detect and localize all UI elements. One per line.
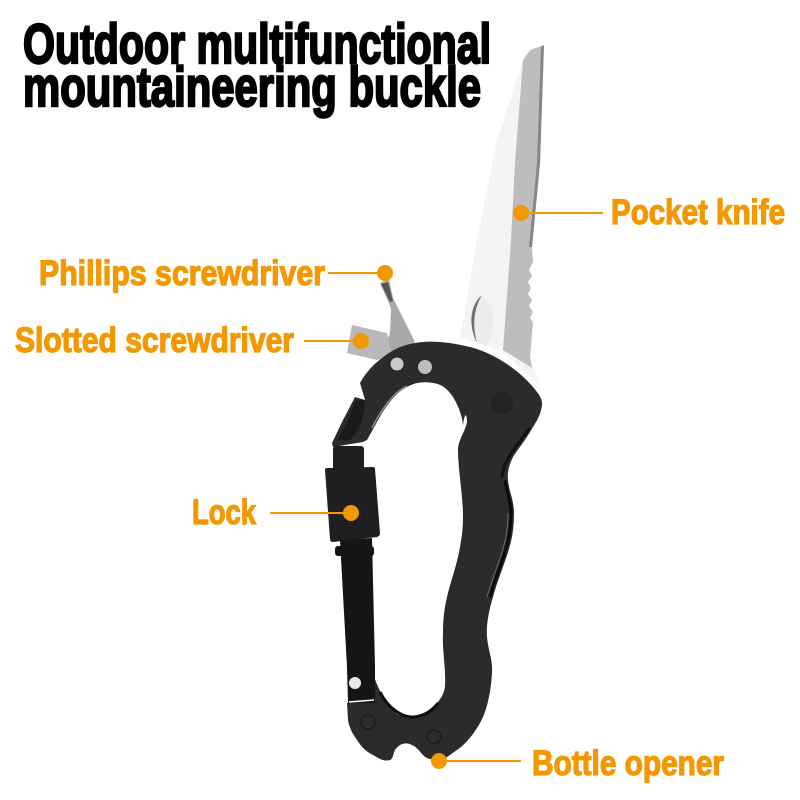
collar — [335, 546, 374, 556]
screw lock sleeve — [325, 467, 380, 542]
carabiner multitool product — [325, 45, 544, 761]
label: bottle opener — [431, 744, 724, 783]
gate rod — [340, 538, 375, 703]
slotted screwdriver tool — [347, 325, 392, 360]
title: Outdoor multifunctional — [23, 12, 491, 75]
phillips screwdriver tool — [380, 279, 415, 356]
label: phillips screwdriver: Phillips screwdriver — [39, 254, 325, 293]
label: slotted screwdriver: Slotted screwdriver — [15, 321, 294, 360]
title — [23, 12, 491, 118]
hinge — [333, 446, 364, 470]
label: lock: Lock — [192, 493, 256, 532]
label: bottle opener: Bottle opener — [532, 744, 724, 783]
blade thumb hole — [471, 295, 482, 343]
title: mountaineering buckle — [23, 55, 481, 118]
label: lock — [192, 493, 359, 532]
carabiner edge highlights — [490, 480, 511, 597]
aluminium carabiner body — [332, 342, 542, 761]
label: pocket knife — [513, 193, 785, 232]
rivets — [349, 358, 513, 744]
knife blade — [460, 45, 544, 385]
